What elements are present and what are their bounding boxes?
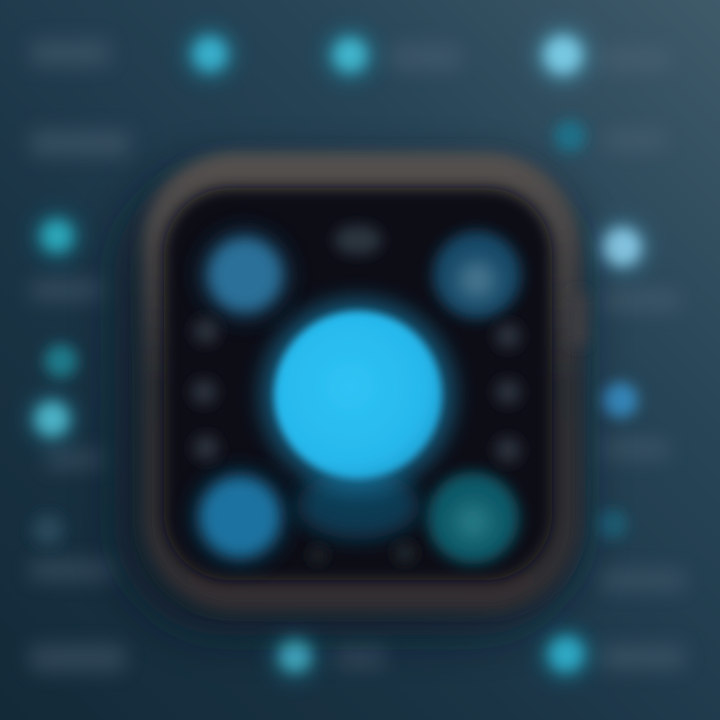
app icon lower right <box>427 472 519 564</box>
app icon lower left <box>192 469 288 565</box>
icon: left dot one <box>31 210 83 262</box>
icon: bottom right dot <box>540 628 592 680</box>
watch screen <box>164 188 552 580</box>
icon: left faint dot <box>32 514 64 546</box>
icon: right dot three <box>597 509 627 539</box>
smartwatch <box>115 152 588 635</box>
icon: left dot two <box>44 344 78 378</box>
app icon upper right <box>433 231 521 319</box>
central glow <box>260 297 456 493</box>
watch case <box>142 152 580 612</box>
icon: top left dot <box>183 27 237 81</box>
screen small dots left <box>191 318 219 461</box>
icon: top right dot <box>534 26 592 84</box>
watch crown <box>570 292 588 346</box>
watch shadow <box>115 165 585 635</box>
icon: top center dot <box>323 28 377 82</box>
bottom screen marks <box>310 543 415 563</box>
icon: left dot three <box>26 393 78 445</box>
icon: right dot one <box>594 219 650 275</box>
top app icon <box>334 225 382 255</box>
icon: right dot two <box>602 382 638 418</box>
side text placeholders <box>30 40 685 671</box>
app icon upper left <box>199 229 291 321</box>
outer floating icons <box>26 26 650 681</box>
icon: bottom center dot <box>269 629 321 681</box>
central circle <box>274 311 442 479</box>
icon: upper right small dot <box>554 120 586 152</box>
screen small dots right <box>495 323 521 463</box>
bottom glow below center <box>296 471 420 539</box>
